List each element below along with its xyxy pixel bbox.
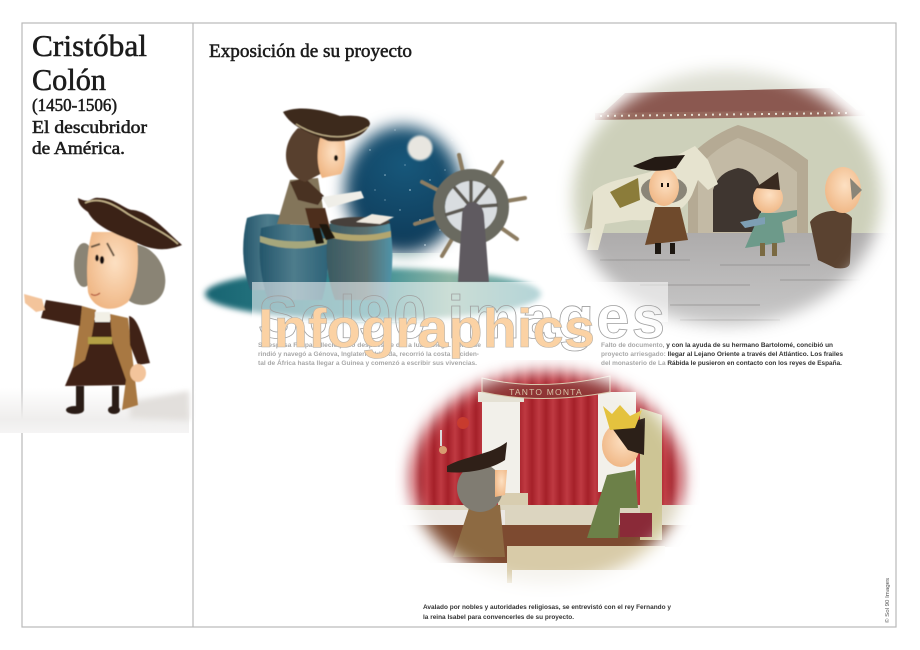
hair (612, 418, 645, 455)
open book (322, 191, 364, 208)
caption 3 line 1: Avalado por nobles y autoridades religiosas, se entrevistó con el rey Fernando y (423, 604, 671, 611)
collar (95, 312, 110, 322)
lower floor (395, 547, 700, 597)
floor (395, 505, 700, 527)
resting hand (130, 364, 146, 382)
pointing hand (24, 294, 45, 312)
legs (760, 243, 777, 256)
wheel inner spokes (445, 180, 498, 215)
barrels (243, 214, 394, 300)
tricorn hat (283, 109, 370, 141)
tunic (65, 320, 128, 386)
column left (482, 400, 520, 495)
coat (745, 210, 797, 248)
cushion (620, 513, 652, 537)
hat trim (85, 200, 178, 244)
back barrel (243, 214, 292, 290)
column right (598, 392, 636, 492)
door (713, 168, 761, 232)
arm (740, 217, 765, 228)
watermark (252, 282, 668, 359)
left carpet (420, 545, 510, 563)
face (495, 470, 507, 497)
barrel top (330, 217, 390, 227)
tricorn hat (78, 198, 182, 249)
floor (570, 233, 884, 334)
column capital (478, 392, 524, 402)
scene 3: audience with the queen (395, 360, 700, 597)
Columbus kneeling from behind (439, 417, 507, 557)
monk (810, 167, 862, 268)
banner (482, 376, 610, 398)
boy (740, 172, 797, 256)
eye (334, 155, 338, 161)
pedestal (498, 493, 528, 505)
face (649, 168, 679, 206)
wheel post (458, 202, 489, 282)
floor shadow under main figure (0, 388, 189, 433)
hair (286, 128, 330, 182)
carpet (395, 525, 700, 547)
subtitle line 2: de América. (32, 138, 125, 158)
right barrel band (328, 231, 391, 241)
face (753, 188, 783, 213)
watermark panel (252, 282, 668, 322)
caption 3 (423, 604, 671, 621)
breeches (305, 208, 330, 228)
night sky (332, 113, 471, 265)
caption 1 line 3: tal de África hasta llegar a Guinea y comenzó a escribir sus vivencias. (258, 358, 477, 367)
eyes (662, 183, 668, 187)
paper on barrel (356, 214, 394, 224)
scene 1: Columbus writing at night (200, 108, 544, 324)
habit (810, 211, 852, 268)
curtain (395, 360, 700, 508)
throne back (640, 408, 662, 540)
wig (457, 464, 503, 512)
face (602, 423, 640, 467)
coat (277, 178, 326, 226)
seated Columbus (277, 109, 370, 244)
belt (88, 337, 112, 344)
inner arch (698, 138, 797, 233)
paving lines (600, 260, 860, 320)
saddle (610, 178, 640, 208)
roof (604, 88, 855, 113)
legs (655, 243, 675, 254)
coat panels (73, 306, 138, 410)
ship wheel (415, 155, 525, 282)
wig (74, 243, 165, 305)
wheel spokes (415, 155, 525, 256)
front barrel (260, 224, 328, 300)
horse tail (584, 194, 593, 230)
left pale floor (395, 510, 505, 532)
upper wall (633, 66, 812, 92)
caption 1 line 1: Su esposa Felipa falleció poco después de dar a luz a Diego. Colón se (258, 342, 481, 349)
crown (603, 405, 642, 430)
legs and shoes (66, 386, 120, 414)
steps (507, 546, 665, 583)
front barrel band (260, 236, 327, 249)
hat (633, 155, 685, 171)
credit: © Sol 90 Images (884, 578, 891, 623)
caption 2 line 3: del monasterio de La Rábida le pusieron en contacto con los reyes de España. (601, 360, 842, 367)
boots (312, 224, 335, 244)
subtitle line 1: El descubridor (32, 117, 147, 137)
queen throne (587, 405, 662, 540)
title: surname: Colón (32, 62, 106, 97)
green dress (587, 470, 638, 538)
main figure: Columbus pointing (24, 198, 182, 414)
apple (457, 417, 469, 429)
banner: TANTO MONTA (509, 387, 583, 397)
coat (645, 207, 688, 245)
heading: Exposición de su proyecto (209, 41, 412, 62)
wheel rim (439, 175, 503, 239)
hat (447, 442, 507, 472)
eye (95, 255, 104, 264)
stone arch (688, 125, 808, 233)
sea ellipse (200, 264, 544, 324)
back arm (129, 316, 150, 365)
face (87, 232, 138, 309)
caption 1 line 2: rindió y navegó a Génova, Inglaterra, Irlanda, recorrió la costa occiden- (258, 351, 479, 358)
sleeve (290, 178, 324, 205)
hair (755, 172, 780, 190)
wheel inner disc (445, 181, 497, 233)
coat (453, 505, 505, 557)
horse body (587, 146, 718, 250)
head (825, 167, 861, 213)
tonsure (850, 178, 862, 200)
roof trim (595, 110, 865, 120)
caption 1 (258, 342, 481, 367)
right barrel (327, 220, 392, 300)
scene 2: monastery of La Rábida (564, 64, 890, 334)
moon (408, 136, 432, 160)
watermark: Sol90 images: Sol90 images (258, 284, 665, 351)
caption 2 (601, 342, 843, 367)
profile face (318, 135, 345, 178)
wig (641, 178, 687, 204)
dates: (1450-1506) (32, 95, 117, 116)
caption 3 line 2: la reina Isabel para convencerles de su proyecto. (423, 614, 574, 621)
hat trim (296, 124, 368, 137)
wall (564, 95, 890, 233)
raised hand and knife (439, 430, 447, 454)
caption 2 line 2: proyecto arriesgado: llegar al Lejano Oriente a través del Atlántico. Los frailes (601, 351, 843, 358)
title: name: Cristóbal (32, 28, 147, 63)
mouth (91, 293, 100, 295)
caption 2 line 1: Falto de documento, y con la ayuda de su hermano Bartolomé, concibió un (601, 342, 833, 349)
Columbus (633, 155, 688, 254)
eyebrow (91, 243, 114, 256)
watermark: Infographics: Infographics (258, 297, 595, 359)
horse (584, 146, 718, 250)
pointing arm (41, 300, 82, 326)
title block (32, 28, 147, 158)
